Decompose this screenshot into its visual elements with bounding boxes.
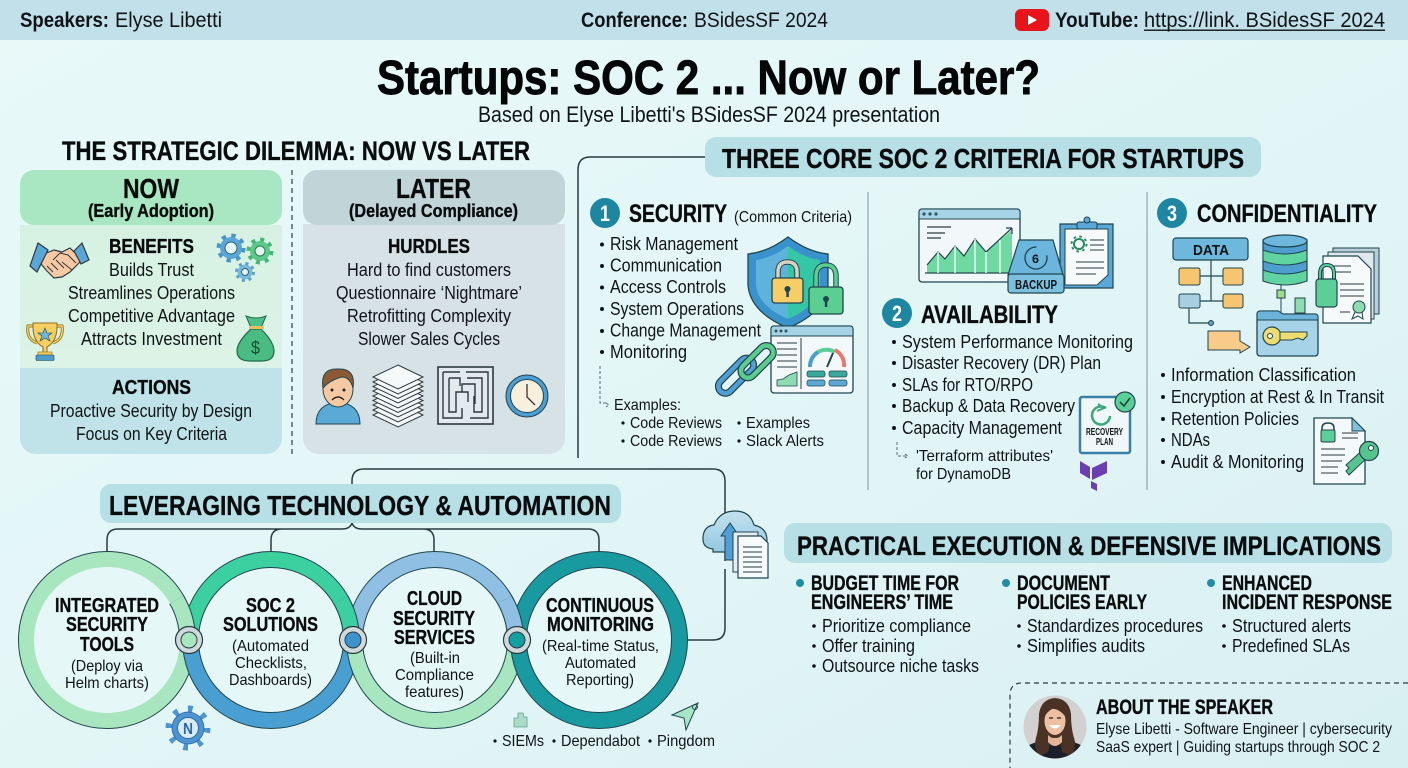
speaker portrait xyxy=(1023,695,1087,759)
number badge 3: 3 xyxy=(1167,201,1177,226)
speakers label: Speakers: xyxy=(20,9,109,32)
terraform note: 'Terraform attributes' xyxy=(916,448,1053,465)
confidentiality bullets: Encryption at Rest & In Transit xyxy=(1171,387,1384,407)
icon: terraform logo xyxy=(1080,461,1107,491)
confidentiality bullets: Retention Policies xyxy=(1171,409,1299,429)
ring: continuous monitoring xyxy=(518,560,680,720)
confidentiality bullets: NDAs xyxy=(1171,430,1210,450)
examples list: Code Reviews xyxy=(630,433,722,450)
icon: trophy xyxy=(28,323,62,360)
confidentiality bullets: Information Classification xyxy=(1171,365,1356,385)
column: document policies: Simplifies audits xyxy=(1027,636,1145,656)
ring: soc 2 solutions xyxy=(190,560,352,720)
speaker bio: ABOUT THE SPEAKER xyxy=(1096,696,1273,719)
heading: strategic dilemma: THE STRATEGIC DILEMMA: NOW VS LATER xyxy=(62,136,530,166)
icon: performance chart window xyxy=(919,209,1020,282)
icon: handshake xyxy=(30,243,89,278)
hurdles list: HURDLES xyxy=(388,236,470,258)
panel: later xyxy=(303,170,565,454)
confidentiality bullets: Audit & Monitoring xyxy=(1171,452,1304,472)
terraform note xyxy=(916,448,1053,483)
benefits list xyxy=(68,236,235,349)
icon: backup drive: BACKUP xyxy=(1015,277,1057,292)
column: document policies: DOCUMENT xyxy=(1017,572,1110,595)
icon: money bag xyxy=(237,316,274,361)
text: cloud security services: CLOUD xyxy=(407,588,462,610)
text: continuous monitoring: Automated xyxy=(565,655,636,672)
benefits list: Competitive Advantage xyxy=(68,306,235,326)
youtube link: https://link. BSidesSF 2024 xyxy=(1144,9,1385,32)
ring: cloud security services xyxy=(354,560,516,720)
confidentiality bullets xyxy=(1161,365,1384,472)
column: incident response: ENHANCED xyxy=(1222,572,1312,595)
conference label: Conference: xyxy=(581,9,688,32)
hurdles list: Slower Sales Cycles xyxy=(358,329,500,349)
text: soc 2 solutions: SOLUTIONS xyxy=(223,614,318,636)
conference label: BSidesSF 2024 xyxy=(694,9,828,32)
text: soc 2 solutions: SOC 2 xyxy=(246,595,295,617)
security bullets: Monitoring xyxy=(610,342,687,362)
security bullets xyxy=(600,234,761,362)
security bullets: Communication xyxy=(610,256,722,276)
text: continuous monitoring: CONTINUOUS xyxy=(546,595,654,617)
icon: backup drive: 6 xyxy=(1032,252,1039,266)
hurdles list: Questionnaire ‘Nightmare’ xyxy=(336,283,522,303)
security heading xyxy=(629,200,852,228)
icon: paper stack xyxy=(373,365,423,427)
text: integrated security tools: SECURITY xyxy=(66,614,149,636)
tools list: Dependabot xyxy=(561,733,641,750)
text: integrated security tools: Helm charts) xyxy=(65,675,149,692)
examples list xyxy=(614,397,824,450)
hurdles list xyxy=(336,236,522,349)
text: continuous monitoring xyxy=(542,595,659,689)
panel: now xyxy=(20,170,282,454)
availability bullets: Disaster Recovery (DR) Plan xyxy=(902,353,1101,373)
criterion 1: security xyxy=(590,198,853,450)
icon: youtube xyxy=(1015,9,1049,31)
column: incident response xyxy=(1207,572,1392,656)
node 1 xyxy=(176,626,202,654)
icon: cloud and documents xyxy=(703,511,768,578)
icon: shield with padlocks xyxy=(748,237,843,328)
connector: bracket to rings xyxy=(107,523,599,552)
subtitle: Based on Elyse Libetti's BSidesSF 2024 presentation xyxy=(478,102,940,127)
text: cloud security services: SERVICES xyxy=(394,627,475,649)
availability bullets: SLAs for RTO/RPO xyxy=(902,375,1033,395)
examples list: Code Reviews xyxy=(630,415,722,432)
column: incident response: Predefined SLAs xyxy=(1232,636,1350,656)
text: cloud security services: (Built-in xyxy=(410,650,460,667)
tools list: Pingdom xyxy=(657,733,715,750)
icon: dashboard xyxy=(771,326,853,393)
benefits list: Attracts Investment xyxy=(81,329,222,349)
now heading: (Early Adoption) xyxy=(88,201,214,221)
now heading: NOW xyxy=(123,173,179,204)
text: cloud security services xyxy=(393,588,476,701)
security bullets: Risk Management xyxy=(610,234,738,254)
icon: database xyxy=(1263,235,1307,313)
tools list xyxy=(493,733,715,750)
icon: n gear xyxy=(170,710,206,746)
icon: document and key xyxy=(1314,418,1378,484)
criterion 3: confidentiality xyxy=(1157,198,1384,484)
panel: about the speaker xyxy=(1010,683,1408,768)
icon: recovery plan xyxy=(1080,392,1135,453)
text: continuous monitoring: MONITORING xyxy=(547,614,654,636)
benefits list: Streamlines Operations xyxy=(68,283,235,303)
icon: folder with key xyxy=(1257,311,1318,356)
security heading: SECURITY xyxy=(629,200,727,228)
youtube link: YouTube: xyxy=(1055,9,1139,32)
column: budget time: BUDGET TIME FOR xyxy=(811,572,959,595)
icon: maze xyxy=(438,367,493,424)
availability bullets: System Performance Monitoring xyxy=(902,332,1133,352)
examples list: Examples: xyxy=(614,397,681,414)
benefits list: BENEFITS xyxy=(109,236,194,258)
icon: chain link xyxy=(715,343,776,396)
number badge 1 xyxy=(590,198,620,228)
icon: certified documents xyxy=(1316,248,1379,323)
hurdles list: Retrofitting Complexity xyxy=(347,306,511,326)
heading: leveraging technology xyxy=(100,484,621,523)
number badge 3 xyxy=(1157,198,1187,228)
heading: three core criteria xyxy=(705,137,1261,177)
heading: three core criteria: THREE CORE SOC 2 CRITERIA FOR STARTUPS xyxy=(722,143,1244,174)
header bar xyxy=(0,0,1408,40)
text: soc 2 solutions: Checklists, xyxy=(235,655,307,672)
text: integrated security tools xyxy=(55,595,159,692)
now heading xyxy=(88,173,214,221)
speakers label xyxy=(20,9,222,32)
benefits list: Builds Trust xyxy=(109,260,194,280)
later heading: (Delayed Compliance) xyxy=(349,201,518,221)
column: budget time: Prioritize compliance xyxy=(822,616,971,636)
icon: recovery plan: RECOVERY xyxy=(1086,427,1123,438)
examples list: Slack Alerts xyxy=(746,433,824,450)
number badge 2 xyxy=(882,298,912,328)
text: cloud security services: SECURITY xyxy=(393,608,476,630)
icon: clipboard xyxy=(1060,217,1113,288)
conference label xyxy=(581,9,828,32)
icon: worried person xyxy=(316,369,360,424)
later heading xyxy=(349,173,518,221)
text: continuous monitoring: (Real-time Status, xyxy=(542,638,659,655)
node 2 xyxy=(340,626,366,654)
availability bullets: Backup & Data Recovery xyxy=(902,396,1075,416)
availability bullets: Capacity Management xyxy=(902,418,1062,438)
ring weave overlaps xyxy=(177,600,515,640)
node 3 xyxy=(504,626,530,654)
column: document policies: POLICIES EARLY xyxy=(1017,591,1147,614)
availability heading: AVAILABILITY xyxy=(921,301,1058,329)
text: integrated security tools: (Deploy via xyxy=(71,658,143,675)
security bullets: System Operations xyxy=(610,299,744,319)
column: incident response: Structured alerts xyxy=(1232,616,1351,636)
text: integrated security tools: TOOLS xyxy=(80,634,134,656)
title: Startups: SOC 2 ... Now or Later? xyxy=(377,52,1040,105)
speaker bio xyxy=(1096,696,1392,756)
icon: backup drive xyxy=(1008,240,1064,293)
icon: thumb xyxy=(514,713,527,727)
security bullets: Access Controls xyxy=(610,277,726,297)
ring: integrated security tools xyxy=(26,560,188,720)
criterion 2: availability xyxy=(882,209,1135,491)
text: soc 2 solutions: (Automated xyxy=(232,638,309,655)
column: document policies xyxy=(1002,572,1203,656)
icon: paper plane xyxy=(672,703,698,730)
connector: dilemma to criteria xyxy=(578,157,705,458)
actions list: Proactive Security by Design xyxy=(50,401,252,421)
number badge 2: 2 xyxy=(892,301,902,326)
text: integrated security tools: INTEGRATED xyxy=(55,595,159,617)
availability bullets xyxy=(892,332,1133,438)
icon: money bag: $ xyxy=(251,338,260,358)
actions list xyxy=(50,377,252,444)
column: budget time: Offer training xyxy=(822,636,915,656)
hurdles list: Hard to find customers xyxy=(347,260,511,280)
chain of four rings xyxy=(26,560,680,720)
terraform note: for DynamoDB xyxy=(916,466,1011,483)
icon: recovery plan: PLAN xyxy=(1096,437,1113,448)
column: document policies: Standardizes procedures xyxy=(1027,616,1203,636)
number badge 1: 1 xyxy=(600,201,610,226)
heading: leveraging technology: LEVERAGING TECHNOLOGY & AUTOMATION xyxy=(109,490,611,521)
icon: gears xyxy=(218,236,272,280)
column: budget time xyxy=(796,572,979,676)
column: budget time: Outsource niche tasks xyxy=(822,656,979,676)
text: soc 2 solutions xyxy=(223,595,318,689)
actions list: ACTIONS xyxy=(112,377,191,399)
text: cloud security services: features) xyxy=(405,684,464,701)
examples list: Examples xyxy=(746,415,810,432)
icon: n gear: N xyxy=(183,721,193,738)
text: continuous monitoring: Reporting) xyxy=(566,672,634,689)
column: budget time: ENGINEERS’ TIME xyxy=(811,591,953,614)
security heading: (Common Criteria) xyxy=(734,209,852,226)
later heading: LATER xyxy=(396,173,471,204)
tools list: SIEMs xyxy=(502,733,544,750)
connector: automation to execution xyxy=(352,469,725,640)
text: cloud security services: Compliance xyxy=(395,667,474,684)
speakers label: Elyse Libetti xyxy=(115,9,222,32)
text: soc 2 solutions: Dashboards) xyxy=(229,672,312,689)
security bullets: Change Management xyxy=(610,320,761,340)
actions list: Focus on Key Criteria xyxy=(76,424,228,444)
icon: data tree: DATA xyxy=(1193,242,1229,259)
icon: data tree xyxy=(1173,238,1250,353)
icon: clock xyxy=(506,375,548,417)
